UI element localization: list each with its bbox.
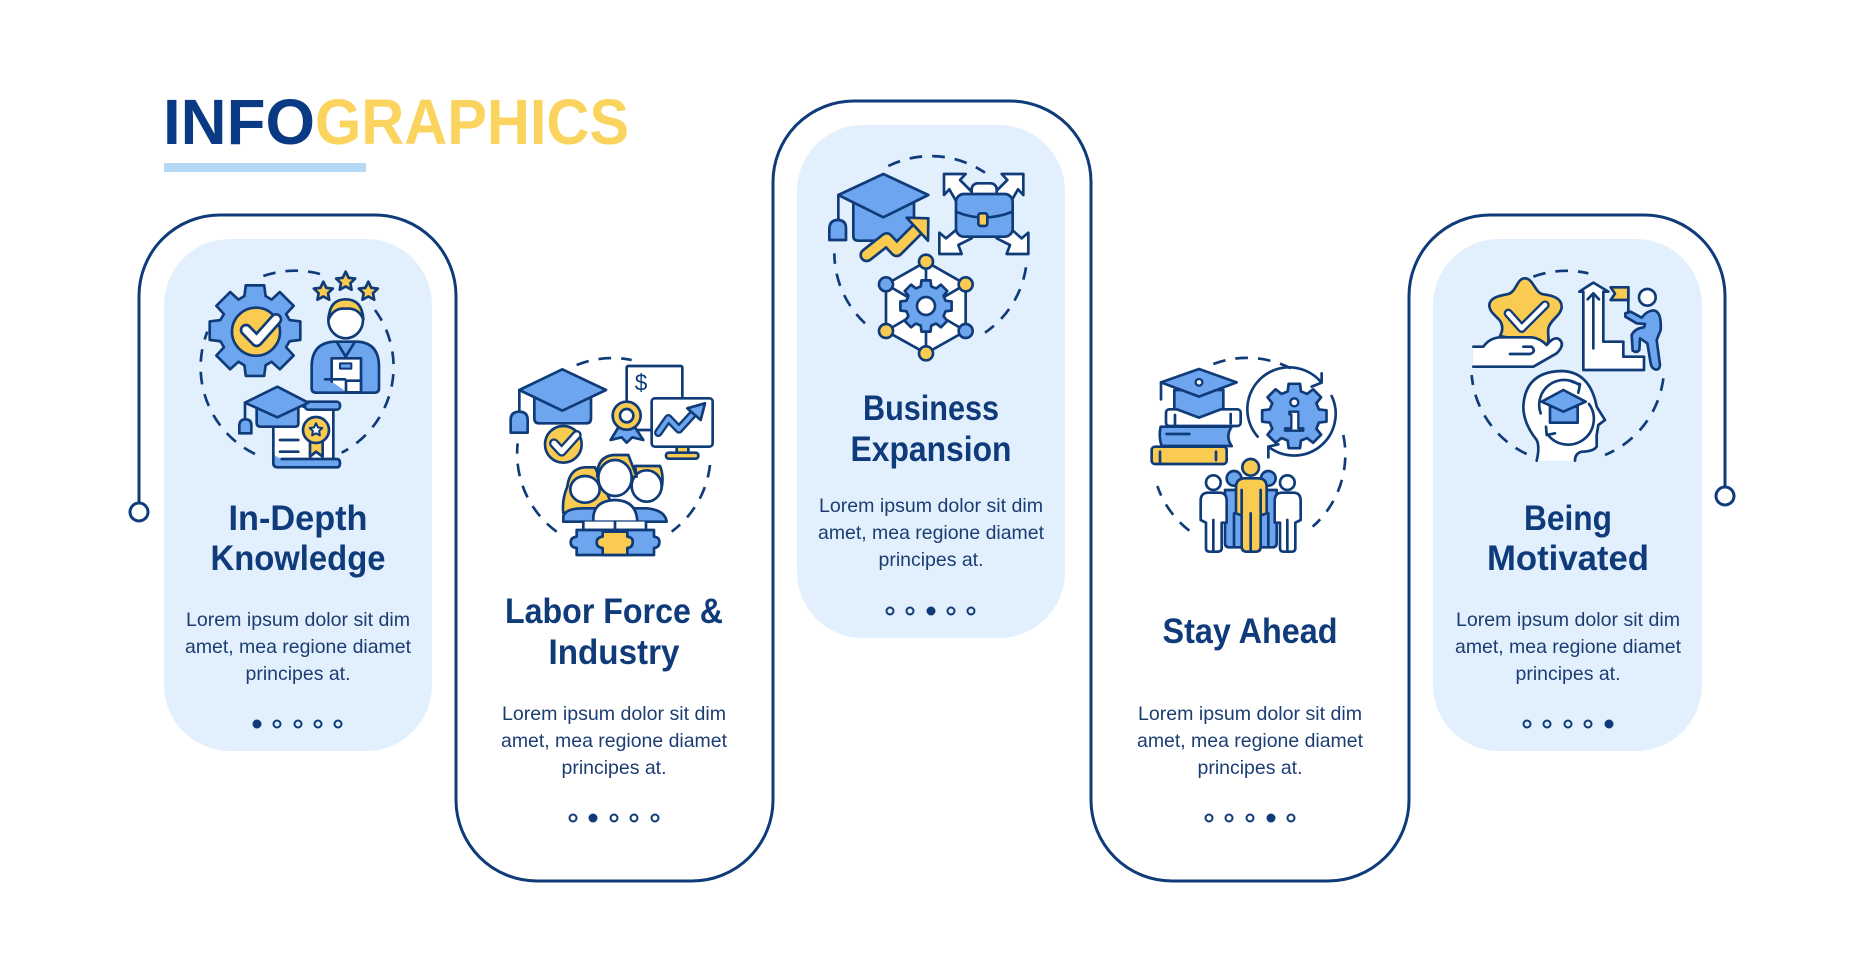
heading: Business [863,389,999,428]
heading: Being [1524,499,1612,538]
pagination dots [1206,814,1294,822]
panel: business expansion [797,125,1065,638]
panel: labor force and industry [501,358,728,822]
heading: Labor Force & [505,592,723,631]
title: INFO [163,86,315,158]
icon: star in hand, climber, mind [1472,271,1663,461]
icon: gear, expert, diploma [201,271,394,467]
heading: Expansion [850,430,1012,469]
icon: cap, certificate, chart, team, puzzle [511,358,713,555]
description: amet, mea regione diamet [818,522,1045,544]
heading [505,592,723,672]
title underline [164,163,366,172]
title [163,86,629,158]
description [818,495,1045,571]
description: Lorem ipsum dolor sit dim [819,495,1043,517]
title: GRAPHICS [315,86,629,158]
description: principes at. [1198,757,1302,779]
connecting outline [139,101,1725,881]
description: Lorem ipsum dolor sit dim [1456,609,1680,631]
panel: being motivated [1433,239,1702,751]
description [501,703,728,779]
description [1455,609,1682,685]
outline start node [130,503,148,521]
description: amet, mea regione diamet [501,730,728,752]
description [1137,703,1364,779]
description: Lorem ipsum dolor sit dim [186,609,410,631]
description: principes at. [246,663,350,685]
heading: Motivated [1487,539,1649,578]
description: Lorem ipsum dolor sit dim [502,703,726,725]
heading: Industry [548,633,680,672]
description: principes at. [562,757,666,779]
pagination dots [252,720,342,728]
heading: Stay Ahead [1162,612,1338,651]
icon: cap, certificate, chart, team, puzzle: $ [635,370,648,396]
heading [850,389,1012,469]
panel: stay ahead [1137,358,1364,822]
description: amet, mea regione diamet [1455,636,1682,658]
description: principes at. [878,549,984,571]
description: principes at. [1516,663,1620,685]
heading [1487,499,1649,578]
description [185,609,412,685]
pagination dots [1524,720,1614,728]
description: amet, mea regione diamet [1137,730,1364,752]
panel: in-depth knowledge [164,239,432,751]
pagination dots [886,606,974,616]
icon: books, info gear, group [1152,358,1345,552]
description: amet, mea regione diamet [185,636,412,658]
heading [210,499,386,578]
description: Lorem ipsum dolor sit dim [1138,703,1362,725]
outline end node [1716,487,1734,505]
heading: Knowledge [210,539,386,578]
pagination dots [570,814,658,822]
heading: In-Depth [228,499,368,538]
icon: cap, briefcase, network gear [829,156,1028,360]
